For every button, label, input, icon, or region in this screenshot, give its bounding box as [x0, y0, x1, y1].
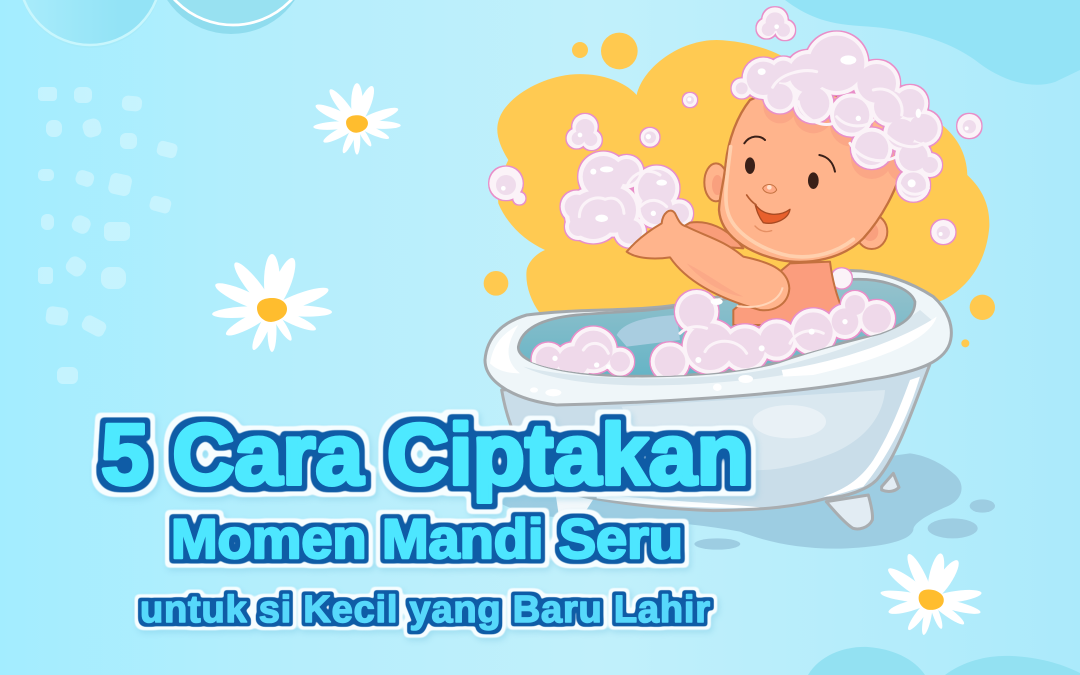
tub body — [502, 365, 930, 511]
icon: daisy small — [313, 83, 401, 155]
baby back arm — [683, 222, 743, 248]
baby head and face — [718, 96, 900, 262]
tub rim — [485, 271, 951, 405]
yellow splash background — [497, 40, 989, 333]
title line 1: 5 Cara Ciptakan — [101, 407, 749, 503]
baby front arm and hand — [627, 211, 789, 310]
baby ears — [704, 163, 887, 249]
icon: daisy large — [212, 254, 332, 352]
decorative bubble circles top left — [18, 0, 313, 48]
mouth — [747, 195, 790, 232]
foam in tub right — [651, 290, 895, 381]
nose — [763, 184, 777, 193]
tub floor shadow — [487, 453, 995, 550]
eyebrows — [744, 137, 835, 172]
icon: daisy bottom right — [873, 543, 991, 646]
eyes — [745, 157, 819, 189]
baby torso — [733, 262, 843, 325]
small foam puffs and bubbles — [489, 7, 981, 244]
pattern of pale dabs on the left — [38, 87, 179, 384]
title line 2: Momen Mandi Seru — [171, 507, 683, 570]
tub feet — [555, 473, 899, 529]
yellow dots — [484, 33, 995, 347]
decorative blobs bottom right — [808, 647, 1080, 675]
foam in tub left — [532, 327, 634, 381]
decorative blob top right — [785, 0, 1080, 85]
title line 3: untuk si Kecil yang Baru Lahir — [140, 589, 710, 631]
foam on baby head — [732, 32, 942, 202]
illustration: baby in bathtub — [484, 7, 995, 550]
foam behind baby — [832, 268, 852, 288]
tub basin water — [518, 279, 915, 376]
foam in hand — [561, 152, 693, 248]
